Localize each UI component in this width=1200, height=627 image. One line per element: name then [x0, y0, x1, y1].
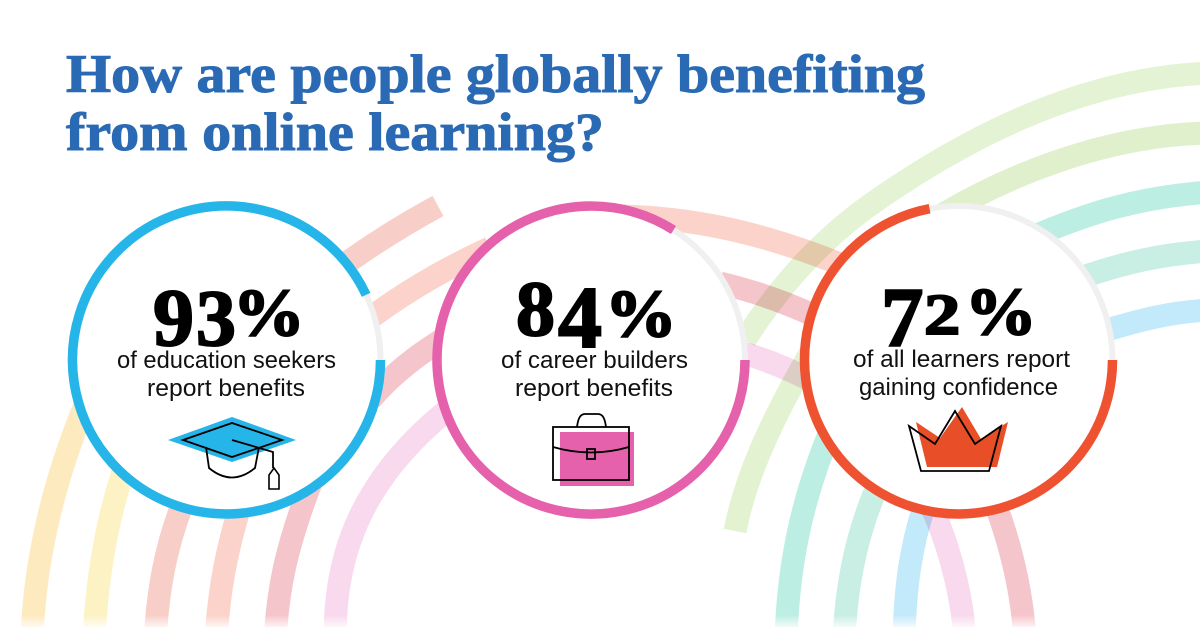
icon: crown	[909, 407, 1008, 471]
stat: 72%	[881, 271, 1037, 365]
text: all learners: of all learners report	[853, 346, 1070, 373]
stat: 84%: 8	[516, 265, 555, 352]
panel: education seekers 93%	[72, 206, 380, 514]
stat: 93%: %	[233, 276, 305, 350]
panel: career builders 84%	[437, 206, 745, 514]
stat: 84%	[516, 265, 677, 367]
progress ring 93%	[73, 206, 381, 514]
text: career builders	[501, 347, 688, 402]
text: education seekers	[117, 347, 336, 402]
title	[66, 44, 925, 162]
text: education seekers: report benefits	[147, 375, 305, 402]
text: career builders: of career builders	[501, 347, 688, 374]
text: all learners: gaining confidence	[859, 374, 1058, 401]
text: career builders: report benefits	[515, 375, 673, 402]
stat: 84%: 4	[558, 270, 602, 367]
stat: 72%: 7	[881, 271, 924, 365]
panel: all learners 72%	[804, 206, 1112, 514]
icon: graduation cap	[168, 417, 296, 489]
stat: 93%: 9	[153, 272, 194, 363]
icon: briefcase	[553, 414, 634, 486]
stat: 72%: 2	[924, 283, 960, 347]
text: all learners	[853, 346, 1070, 401]
stat: 93%: 3	[196, 275, 236, 363]
title: from online learning?	[66, 102, 604, 162]
stat: 72%: %	[965, 275, 1037, 349]
progress ring 84%	[437, 206, 745, 514]
progress ring 72%	[805, 209, 1112, 514]
title: How are people globally benefiting	[66, 44, 925, 104]
stat: 84%: %	[605, 277, 677, 351]
text: education seekers: of education seekers	[117, 347, 336, 374]
stat: 93%	[153, 272, 305, 363]
